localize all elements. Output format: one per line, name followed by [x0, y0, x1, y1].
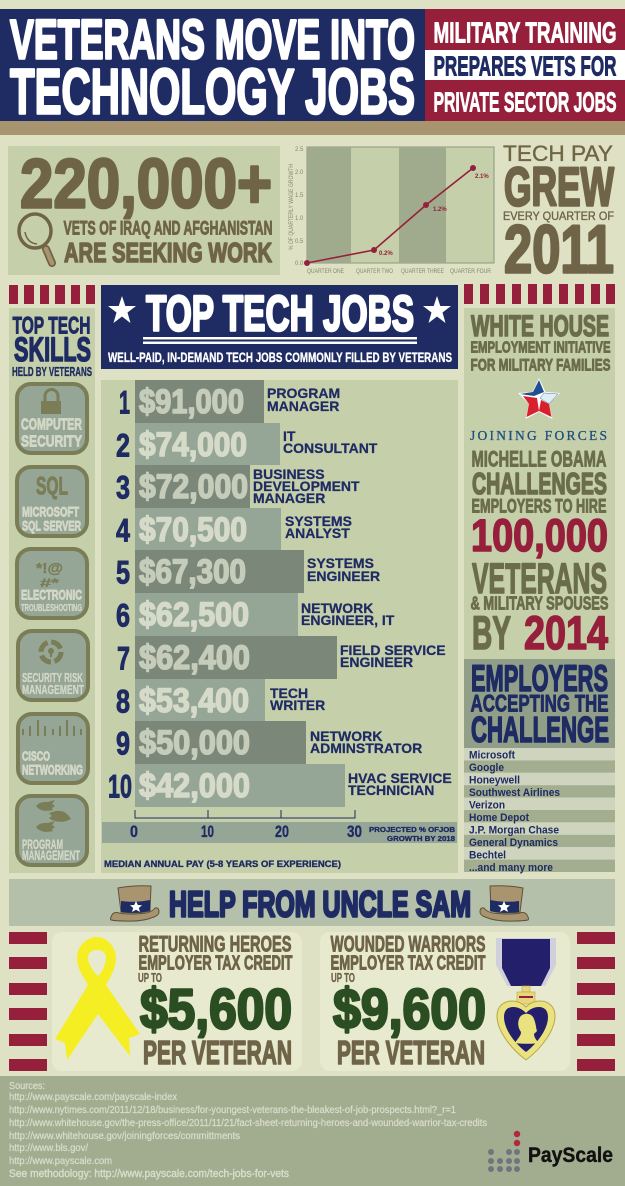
row 9 [116, 721, 422, 764]
row 6: $62,500 [139, 596, 249, 634]
heading [470, 658, 609, 750]
row 5 [116, 550, 380, 593]
employer list [464, 748, 615, 874]
text: returning heroes: PER VETERAN [143, 1034, 292, 1071]
skill: cisco networking: CISCO [22, 748, 50, 764]
row 5: 5 [116, 554, 130, 590]
skill: electronic troubleshooting: ELECTRONIC [21, 586, 82, 602]
sources list: http://www.payscale.com/payscale-index [9, 1092, 177, 1103]
heading: top tech skills: TOP TECH [12, 312, 90, 340]
text: returning heroes: UP TO [138, 970, 162, 985]
skill: microsoft sql server: SQL SERVER [22, 518, 81, 534]
row 2: IT [283, 428, 296, 444]
caption: median annual pay: MEDIAN ANNUAL PAY (5-8 YEARS OF EXPERIENCE) [104, 859, 341, 870]
heading text: HELP FROM UNCLE SAM [169, 884, 471, 925]
subtitle [434, 18, 616, 118]
heading: top tech skills: SKILLS [14, 331, 91, 369]
skill: computer security [17, 384, 87, 453]
growth axis: GROWTH BY 2018 [387, 834, 455, 843]
text: vets of Iraq and Afghanistan: VETS OF IRAQ AND AFGHANISTAN [64, 218, 272, 240]
text: returning heroes: $5,600 [140, 978, 292, 1042]
text: wounded warriors: UP TO [331, 970, 355, 985]
icon: uncle sam hat right [480, 886, 528, 921]
panel: white house initiative [464, 308, 615, 659]
text: tech pay grew every quarter of 2011: TECH PAY [503, 141, 613, 166]
employer list: Honeywell [469, 774, 520, 786]
row 9: 9 [116, 726, 130, 762]
skill: security risk management [18, 631, 88, 700]
panel: top tech skills [9, 308, 95, 873]
growth axis: 10 [201, 822, 214, 841]
employer list: General Dynamics [469, 837, 558, 849]
row 3: BUSINESS [253, 466, 325, 482]
skill: computer security: COMPUTER [21, 416, 82, 434]
sources list: http://www.bls.gov/ [9, 1143, 88, 1154]
row 8: TECH [270, 685, 308, 701]
growth axis: 20 [275, 822, 289, 841]
text: joining forces: JOINING FORCES [470, 428, 607, 443]
row 7: ENGINEER [340, 654, 413, 670]
skill: program management [17, 796, 87, 865]
line chart: quarterly wage growth: 1.0 [295, 216, 304, 222]
text: wounded warriors [330, 932, 486, 1071]
growth axis: PROJECTED % OFJOB [369, 825, 456, 834]
growth axis [102, 810, 457, 843]
row 10: TECHNICIAN [348, 782, 434, 798]
sources list [9, 1081, 487, 1180]
row 1: MANAGER [267, 398, 339, 414]
text: wounded warriors: PER VETERAN [337, 1034, 485, 1071]
row 1: PROGRAM [267, 385, 340, 401]
icon: magnifying glass [19, 214, 52, 263]
row 7: 7 [117, 640, 130, 676]
icon: yellow ribbon [55, 937, 140, 1060]
footer panel [0, 1076, 625, 1186]
text: michelle obama challenge: BY [472, 606, 511, 659]
text: tech pay grew every quarter of 2011: EVERY QUARTER OF [503, 209, 614, 223]
row 4: SYSTEMS [285, 513, 352, 529]
heading: top tech skills [12, 312, 92, 379]
icon: star right [423, 296, 451, 323]
row 4: 4 [116, 512, 130, 548]
row 7: $62,400 [139, 639, 250, 677]
row 2: 2 [116, 428, 130, 464]
icon: purple heart medal [496, 938, 556, 1060]
line chart: quarterly wage growth: 0.5 [295, 239, 304, 245]
text: michelle obama challenge [470, 446, 608, 659]
row 9: $50,000 [139, 724, 250, 762]
row 1 [119, 380, 340, 423]
row 8: $53,400 [139, 682, 249, 720]
skill: electronic troubleshooting: TROUBLESHOOTING [21, 603, 82, 614]
panel: veterans seeking work [8, 145, 280, 275]
panel: returning heroes [52, 932, 302, 1071]
row 3: $72,000 [139, 468, 248, 506]
icon: star left [108, 296, 136, 323]
sources list: See methodology: http://www.payscale.com/tech-jobs-for-vets [9, 1168, 289, 1180]
row 10 [108, 764, 452, 807]
employer list: Google [469, 762, 504, 774]
text: returning heroes [138, 932, 292, 1071]
row 4: ANALYST [285, 525, 350, 541]
line chart: quarterly wage growth: % OF QUARTERLY WAGE GROWTH [289, 164, 295, 250]
skill: security risk management: MANAGEMENT [22, 682, 84, 697]
row 1: $91,000 [139, 383, 244, 421]
subheading: WELL-PAID, IN-DEMAND TECH JOBS COMMONLY FILLED BY VETERANS [108, 349, 452, 365]
employer list: Southwest Airlines [469, 787, 560, 799]
skill: cisco networking [18, 714, 88, 783]
row 9: ADMINSTRATOR [310, 740, 422, 756]
sources list: http://www.nytimes.com/2011/12/18/business/for-youngest-veterans-the-bleakest-of-job-prospects.html?_r=1 [9, 1105, 456, 1116]
heading panel: top tech jobs [101, 285, 458, 369]
banner: help from uncle sam [9, 879, 615, 926]
line chart: quarterly wage growth: QUARTER THREE [401, 269, 444, 275]
row 6 [116, 593, 395, 636]
employer list: ...and many more [469, 862, 553, 874]
row 10: HVAC SERVICE [348, 770, 452, 786]
employer list: J.P. Morgan Chase [469, 824, 559, 836]
row 3: MANAGER [253, 490, 325, 506]
heading: top tech skills: HELD BY VETERANS [12, 364, 92, 379]
line chart: quarterly wage growth: 0.2% [379, 251, 393, 257]
row 3 [116, 465, 360, 508]
line chart: quarterly wage growth: 1.2% [433, 207, 447, 213]
row 9: NETWORK [310, 728, 382, 744]
line chart: quarterly wage growth: QUARTER FOUR [450, 269, 492, 275]
skill: microsoft sql server: MICROSOFT [22, 504, 79, 520]
row 8: WRITER [270, 697, 325, 713]
line chart: quarterly wage growth: 1.5 [295, 193, 304, 199]
icon: joining forces star [518, 378, 560, 419]
text: returning heroes: RETURNING HEROES [138, 932, 292, 956]
row 2: CONSULTANT [283, 440, 378, 456]
row 4 [116, 508, 352, 550]
skill: program management: MANAGEMENT [22, 847, 80, 863]
row 4: $70,500 [139, 511, 247, 549]
skill: computer security: SECURITY [21, 434, 82, 450]
growth axis: 0 [130, 822, 138, 841]
row 7 [117, 636, 446, 679]
text: are seeking work: ARE SEEKING WORK [64, 237, 272, 268]
stripes: left [9, 285, 95, 304]
row 10: 10 [108, 768, 132, 804]
logo: PayScale: PayScale [528, 1144, 613, 1167]
line chart: quarterly wage growth: 2.5 [295, 147, 304, 153]
skill: microsoft sql server [17, 467, 87, 536]
line chart: quarterly wage growth [289, 147, 494, 275]
employer list: Home Depot [469, 812, 529, 824]
employer list: Verizon [469, 800, 505, 812]
stripes: bottom left [9, 932, 47, 1071]
skill: electronic troubleshooting: #* [40, 576, 60, 590]
employer list: Microsoft [469, 750, 515, 762]
stripes: bottom right [577, 932, 615, 1071]
panel: employers accepting the challenge [464, 658, 615, 874]
sources list: http://www.payscale.com [9, 1156, 112, 1167]
header banner [0, 8, 625, 135]
title [10, 8, 415, 128]
skill: program management: PROGRAM [22, 836, 63, 852]
line chart: quarterly wage growth: QUARTER ONE [307, 269, 344, 275]
skill: electronic troubleshooting: *!@ [36, 560, 63, 577]
skill: electronic troubleshooting [17, 549, 87, 618]
text: tech pay grew every quarter of 2011 [503, 141, 614, 288]
row 5: ENGINEER [307, 568, 380, 584]
row 10: $42,000 [139, 767, 250, 805]
row 3: DEVELOPMENT [253, 478, 360, 494]
line chart: quarterly wage growth: 2.0 [295, 170, 304, 176]
text: wounded warriors: WOUNDED WARRIORS [330, 932, 486, 956]
row 7: FIELD SERVICE [340, 642, 446, 658]
icon: uncle sam hat left [110, 886, 159, 921]
sources list: http://www.whitehouse.gov/joiningforces/committments [9, 1131, 240, 1142]
sources list: Sources: [9, 1081, 45, 1092]
row 1: 1 [119, 384, 130, 420]
row 2: $74,000 [139, 426, 247, 464]
line chart: quarterly wage growth: 0.0 [295, 261, 304, 267]
panel: wounded warriors [320, 932, 570, 1071]
text: wounded warriors: $9,600 [333, 978, 486, 1042]
skill: cisco networking: NETWORKING [22, 762, 83, 778]
row 5: SYSTEMS [307, 555, 374, 571]
growth axis: 30 [347, 822, 362, 841]
row 8: 8 [116, 684, 130, 720]
line chart: quarterly wage growth: QUARTER TWO [356, 269, 393, 275]
heading: white house [470, 310, 611, 374]
skill: microsoft sql server: SQL [36, 472, 68, 500]
row 5: $67,300 [139, 553, 246, 591]
line chart: quarterly wage growth: 2.1% [475, 174, 489, 180]
big number: 220,000+ [20, 145, 272, 223]
row 6: NETWORK [301, 600, 373, 616]
row 6: ENGINEER, IT [301, 612, 395, 628]
row 8 [116, 679, 325, 721]
heading text: TOP TECH JOBS [146, 286, 414, 342]
row 3: 3 [116, 470, 130, 506]
stripes: right [464, 284, 615, 304]
row 6: 6 [116, 598, 130, 634]
logo: PayScale [488, 1131, 613, 1172]
bar chart: top tech jobs [101, 380, 458, 873]
title: VETERANS MOVE INTO [10, 8, 415, 71]
skill: security risk management: SECURITY RISK [22, 670, 83, 685]
employer list: Bechtel [469, 850, 506, 862]
text: wounded warriors: EMPLOYER TAX CREDIT [330, 952, 486, 974]
text: returning heroes: EMPLOYER TAX CREDIT [138, 952, 292, 974]
sources list: http://www.whitehouse.gov/the-press-office/2011/11/21/fact-sheet-returning-heroes-and-wounded-warrior-tax-credits [9, 1118, 487, 1129]
row 2 [116, 423, 378, 465]
